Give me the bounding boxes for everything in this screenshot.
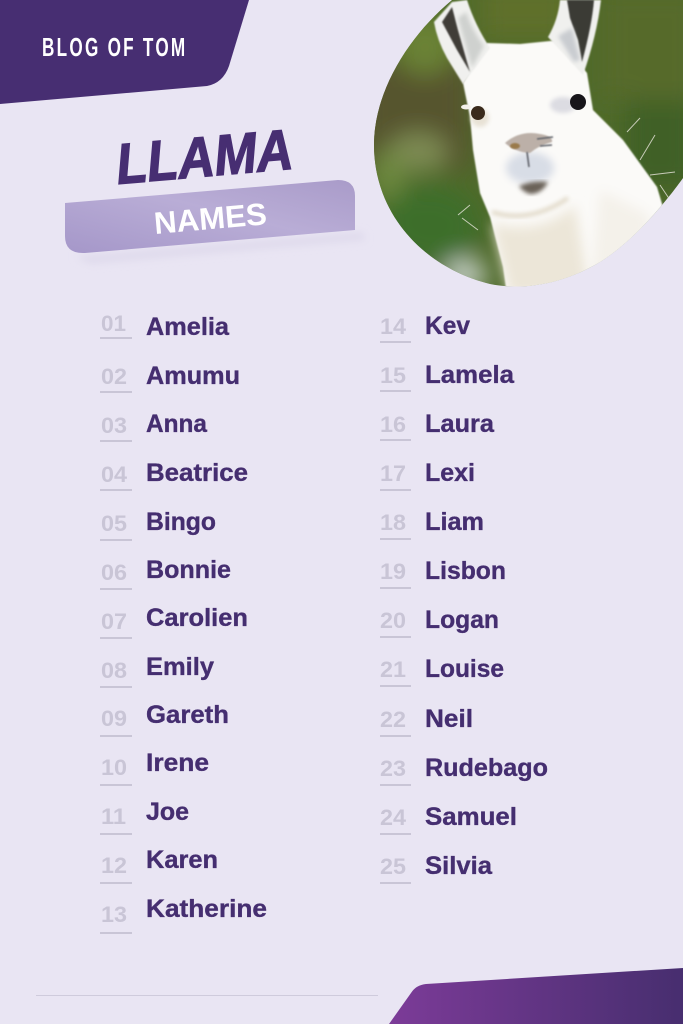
entry 14: Kev xyxy=(425,312,470,340)
entry 09 xyxy=(100,701,229,736)
entry 04 xyxy=(100,459,248,490)
entry 09: 09 xyxy=(101,706,127,731)
left eye patch xyxy=(471,109,489,127)
entry 25: Silvia xyxy=(425,852,493,880)
entry 02: Amumu xyxy=(146,362,240,390)
entry 13 xyxy=(100,895,267,933)
entry 18 xyxy=(380,508,484,539)
entry 19: 19 xyxy=(380,559,406,584)
entry 17 xyxy=(380,459,475,490)
entry 11: 11 xyxy=(101,804,126,829)
names list: column 2 xyxy=(380,312,548,883)
muzzle xyxy=(506,152,554,184)
entry 05 xyxy=(100,508,216,540)
entry 22 xyxy=(380,705,473,736)
entry 07: Carolien xyxy=(146,604,248,632)
entry 21 xyxy=(380,655,504,686)
entry 16 xyxy=(380,410,495,440)
entry 23: 23 xyxy=(380,756,406,781)
right eye xyxy=(570,94,586,110)
entry 17: 17 xyxy=(380,461,406,486)
entry 24 xyxy=(380,803,517,834)
left ear xyxy=(434,0,490,84)
entry 19: Lisbon xyxy=(425,557,506,585)
entry 25 xyxy=(380,852,493,883)
entry 15 xyxy=(380,361,515,391)
title: LLAMA NAMES xyxy=(65,118,366,264)
entry 12: Karen xyxy=(146,846,218,874)
entry 25: 25 xyxy=(380,854,406,879)
heading word LLAMA: LLAMA xyxy=(114,118,295,197)
header banner xyxy=(0,0,249,104)
entry 11 xyxy=(100,798,189,834)
entry 13: 13 xyxy=(101,902,127,927)
entry 01: Amelia xyxy=(146,313,230,341)
entry 14 xyxy=(380,312,470,342)
heading word NAMES: NAMES xyxy=(153,196,268,241)
photo: llama portrait xyxy=(360,0,683,300)
entry 01 xyxy=(100,311,230,341)
entry 20: Logan xyxy=(425,606,499,634)
entry 22: 22 xyxy=(380,707,406,732)
entry 21: Louise xyxy=(425,655,504,683)
entry 12 xyxy=(100,846,218,883)
entry 01: 01 xyxy=(101,311,126,336)
entry 22: Neil xyxy=(425,705,473,733)
whiskers xyxy=(458,118,675,230)
llama body xyxy=(434,0,683,295)
entry 10 xyxy=(100,749,209,785)
entry 10: 10 xyxy=(101,755,127,780)
neck shading xyxy=(492,205,590,295)
entry 08 xyxy=(100,653,214,687)
entry 20: 20 xyxy=(380,608,406,633)
entry 04: 04 xyxy=(101,462,128,487)
entry 16: Laura xyxy=(425,410,495,438)
left eye xyxy=(471,106,485,120)
entry 03 xyxy=(100,410,208,441)
entry 13: Katherine xyxy=(146,895,267,923)
entry 07: 07 xyxy=(101,609,127,634)
entry 09: Gareth xyxy=(146,701,229,729)
entry 05: Bingo xyxy=(146,508,216,536)
entry 18: 18 xyxy=(380,510,406,535)
entry 05: 05 xyxy=(101,511,127,536)
entry 24: Samuel xyxy=(425,803,517,831)
entry 21: 21 xyxy=(380,657,406,682)
footer accent shape xyxy=(389,968,683,1024)
entry 03: 03 xyxy=(101,413,127,438)
entry 18: Liam xyxy=(425,508,484,536)
entry 06: 06 xyxy=(101,560,127,585)
entry 02: 02 xyxy=(101,364,127,389)
mouth xyxy=(519,182,548,194)
entry 23 xyxy=(380,754,548,785)
band behind NAMES xyxy=(65,180,355,253)
chin shadow xyxy=(492,198,568,216)
entry 08: 08 xyxy=(101,658,127,683)
entry 12: 12 xyxy=(101,853,127,878)
entry 07 xyxy=(100,604,248,638)
entry 15: 15 xyxy=(380,363,406,388)
band shadow xyxy=(75,232,366,264)
entry 11: Joe xyxy=(146,798,189,826)
entry 06 xyxy=(100,556,231,589)
entry 02 xyxy=(100,362,240,392)
entry 10: Irene xyxy=(146,749,209,777)
entry 17: Lexi xyxy=(425,459,475,487)
names list: column 1 xyxy=(100,311,267,933)
entry 16: 16 xyxy=(380,412,406,437)
entry 08: Emily xyxy=(146,653,214,681)
entry 20 xyxy=(380,606,499,637)
fur silhouette xyxy=(462,40,663,286)
right ear xyxy=(548,0,601,75)
brow shading xyxy=(550,97,576,113)
entry 03: Anna xyxy=(146,410,208,438)
brand name: BLOG OF TOM xyxy=(42,32,185,62)
entry 19 xyxy=(380,557,506,588)
entry 15: Lamela xyxy=(425,361,515,389)
entry 06: Bonnie xyxy=(146,556,231,584)
entry 04: Beatrice xyxy=(146,459,248,487)
entry 24: 24 xyxy=(380,805,407,830)
nose xyxy=(505,133,552,153)
entry 23: Rudebago xyxy=(425,754,548,782)
entry 14: 14 xyxy=(380,314,407,339)
